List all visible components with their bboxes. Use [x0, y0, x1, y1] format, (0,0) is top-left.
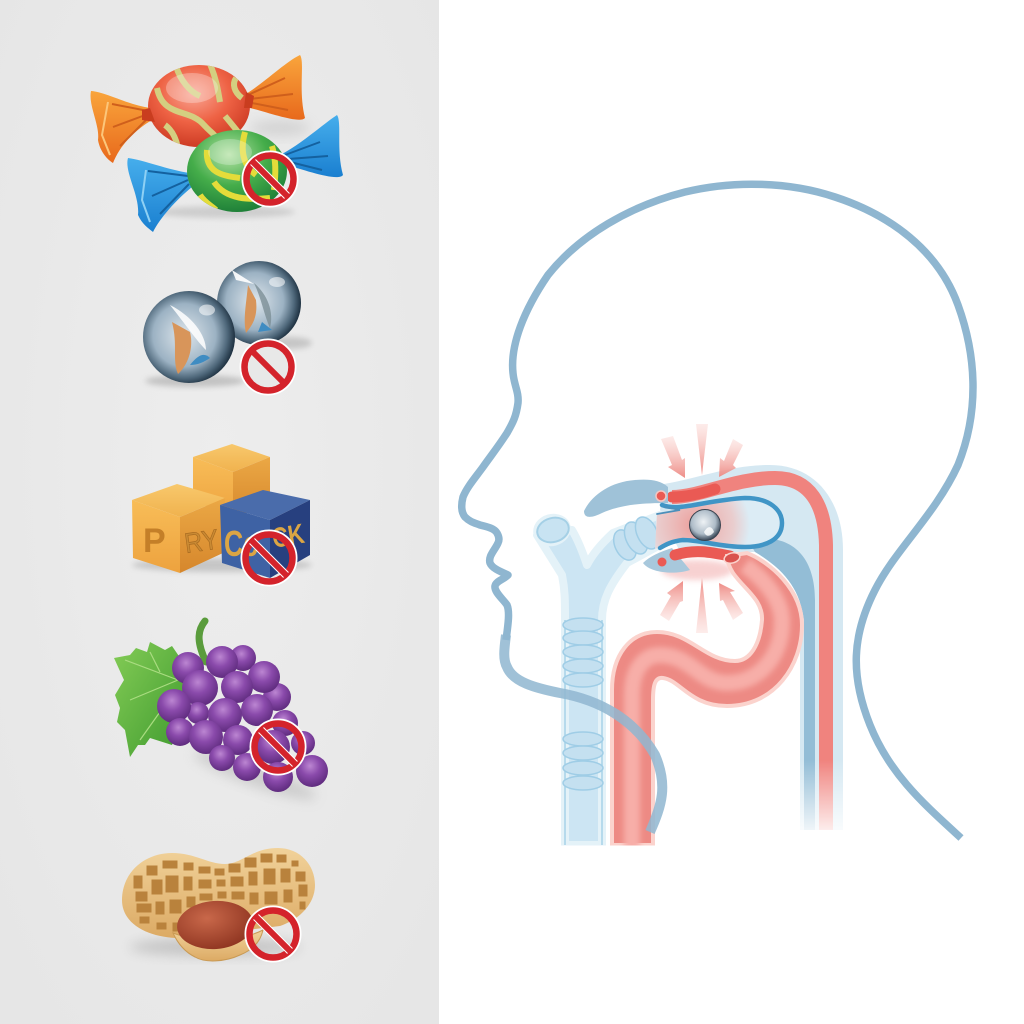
icon: grapes [114, 621, 328, 808]
lodged object [690, 510, 720, 540]
blue block with letters: Cc [224, 523, 258, 564]
icon: prohibition sign [246, 906, 300, 962]
blue block with letters: CK [270, 518, 307, 554]
icon: prohibition sign [250, 720, 306, 774]
diagram: head and airway anatomy [462, 184, 973, 862]
panel: foods to avoid [0, 0, 439, 1024]
blue block with letters [220, 490, 310, 578]
airway lumen with pink glow around object [655, 500, 771, 549]
lower palate blob and glow [643, 548, 733, 580]
pressure arrows above [661, 424, 743, 478]
head silhouette [462, 184, 973, 838]
front yellow block with letters: P [143, 522, 166, 560]
pressure arrows below [660, 578, 743, 633]
blue airway loop [657, 498, 782, 548]
icon: prohibition sign [240, 340, 296, 394]
icon: letter blocks [132, 444, 312, 586]
throat wall: pale blue band [660, 465, 847, 842]
front yellow block with letters [132, 484, 225, 573]
front yellow block with letters: RY [183, 523, 221, 559]
icon: wrapped candies [91, 55, 343, 232]
back yellow block [193, 444, 270, 520]
icon: glass marbles [143, 261, 312, 394]
icon: prohibition sign [242, 152, 298, 206]
nasal passage [584, 480, 668, 517]
esophagus [555, 551, 802, 862]
icon: prohibition sign [242, 530, 296, 586]
icon: peanut [122, 848, 315, 962]
trachea [530, 510, 663, 845]
